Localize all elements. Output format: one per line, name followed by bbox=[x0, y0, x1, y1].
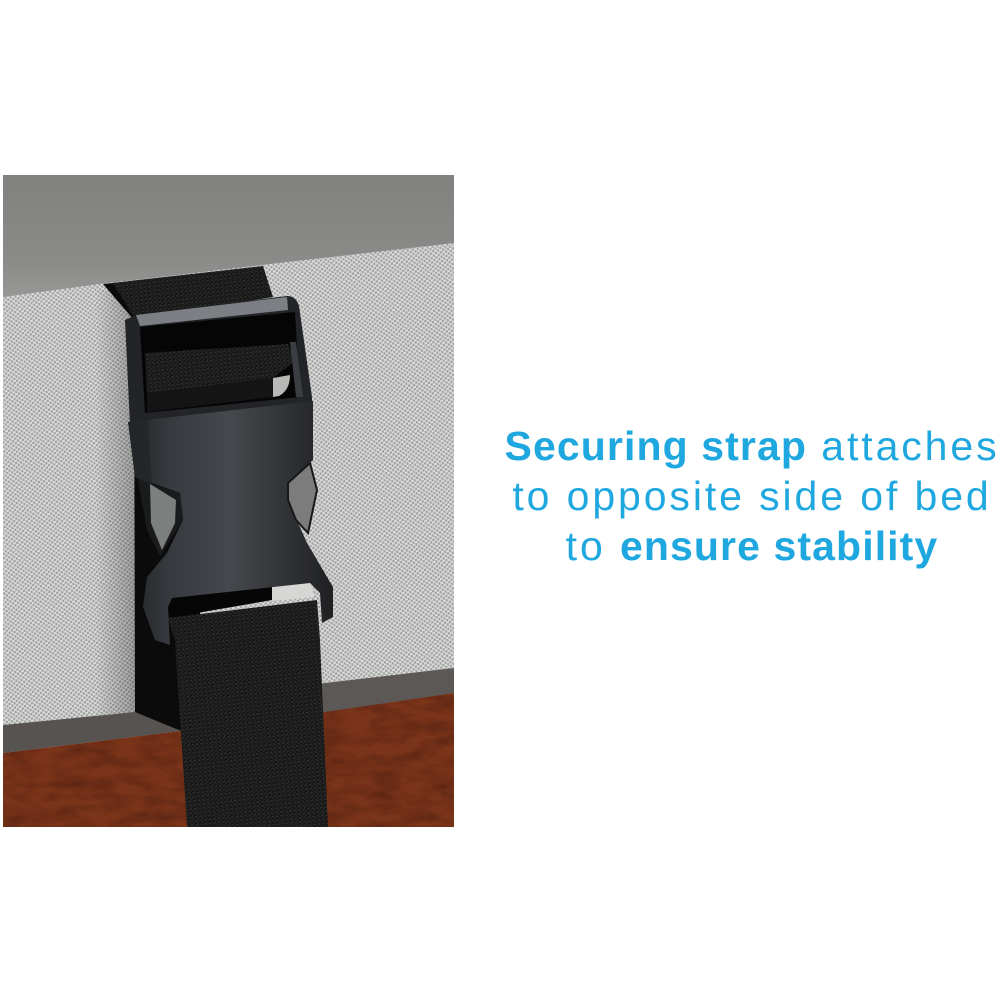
mattress fabric panels bbox=[3, 240, 454, 740]
grey ledge bbox=[3, 668, 454, 753]
photo: buckle and securing strap on bed bbox=[3, 175, 454, 827]
buckle body bbox=[128, 401, 333, 645]
caption text bbox=[505, 423, 999, 569]
gap between mattress panels bbox=[103, 282, 200, 731]
buckle lower opening bbox=[168, 578, 314, 618]
right wing clip bbox=[288, 463, 317, 533]
upper strap bbox=[112, 266, 273, 320]
left wing clip bbox=[138, 480, 183, 556]
left wing opening bbox=[150, 484, 176, 550]
caption line 1: Securing strap attaches bbox=[505, 423, 999, 469]
slider frame bbox=[125, 296, 312, 425]
caption line 2: to opposite side of bed bbox=[512, 473, 992, 519]
lower strap bbox=[168, 600, 328, 827]
top grey panel bbox=[3, 175, 454, 297]
wood base bbox=[3, 693, 454, 827]
caption line 3: to ensure stability bbox=[566, 523, 938, 569]
